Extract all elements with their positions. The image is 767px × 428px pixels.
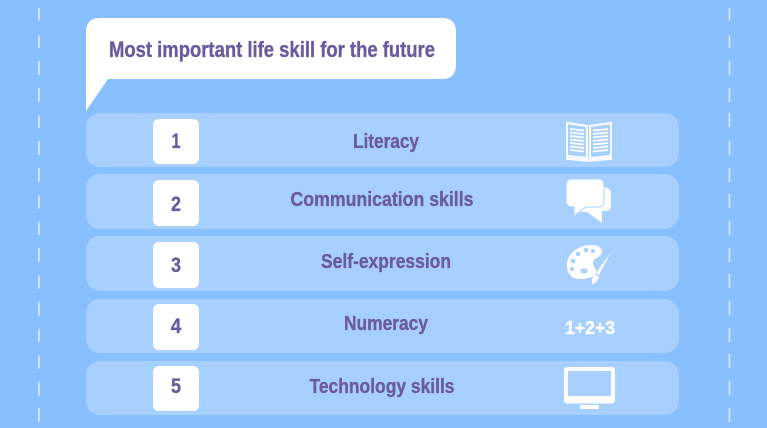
- title: Most important life skill for the future: [109, 37, 435, 62]
- row 5: technology skills: Technology skills: [310, 376, 454, 398]
- icon: open book: [566, 123, 612, 160]
- row 5: technology skills: 5: [171, 375, 181, 398]
- title speech bubble: [86, 18, 456, 111]
- row 2: communication skills: Communication skills: [290, 189, 474, 211]
- icon: paint palette and brush: [567, 245, 611, 284]
- row 4: numeracy: 4: [171, 315, 182, 338]
- icon: speech bubbles: [566, 179, 611, 223]
- row 1: literacy: [86, 113, 679, 167]
- row 4: numeracy: [86, 299, 679, 353]
- icon: monitor: [564, 367, 615, 409]
- row 4: numeracy: Numeracy: [344, 313, 429, 335]
- row 2: communication skills: 2: [171, 193, 181, 216]
- row 3: self-expression: Self-expression: [321, 251, 451, 273]
- row 3: self-expression: [86, 236, 679, 291]
- icon: 1+2+3: 1+2+3: [565, 318, 615, 338]
- row 2: communication skills: [86, 174, 679, 229]
- row 1: literacy: 1: [172, 130, 181, 153]
- row 1: literacy: Literacy: [353, 131, 420, 153]
- row 5: technology skills: [86, 361, 679, 415]
- row 3: self-expression: 3: [171, 254, 181, 277]
